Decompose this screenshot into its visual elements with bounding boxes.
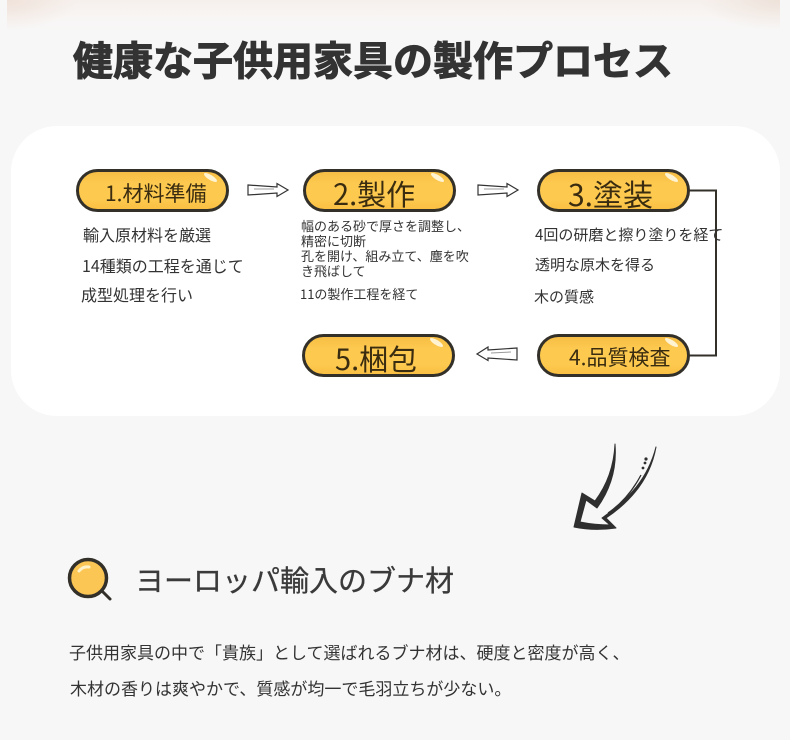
step 2 pill	[303, 169, 456, 212]
step 2 text: 精密に切断	[301, 231, 366, 250]
step 3 text: 透明な原木を得る	[535, 254, 655, 275]
step 2 text: 幅のある砂で厚さを調整し、	[301, 216, 470, 235]
body text: 子供用家具の中で「貴族」として選ばれるブナ材は、硬度と密度が高く、	[69, 639, 630, 664]
step 2 text: き飛ばして	[301, 261, 366, 280]
arrow: step 1 to 2	[247, 182, 289, 198]
step 3 pill	[537, 169, 690, 212]
step 1 text: 14種類の工程を通じて	[82, 253, 244, 277]
step 2 text: 孔を開け、組み立て、塵を吹	[301, 246, 469, 265]
connector: step 3 to 4	[690, 190, 717, 356]
step 1 text: 輸入原材料を厳選	[83, 222, 211, 246]
step 1 pill	[76, 169, 229, 212]
step 1 pill: 1.材料準備	[105, 178, 206, 208]
step 3 text	[534, 224, 723, 307]
body text	[69, 639, 630, 700]
icon: magnifying glass	[68, 558, 112, 601]
step 3 text: 木の質感	[534, 286, 594, 307]
arrow: step 2 to 3	[477, 182, 519, 198]
title: 健康な子供用家具の製作プロセス	[73, 29, 673, 87]
icon: large hand-drawn arrow	[574, 444, 656, 530]
heading: beech wood: ヨーロッパ輸入のブナ材	[135, 558, 454, 600]
step 2 text	[300, 216, 470, 303]
step 2 text: 11の製作工程を経て	[300, 284, 418, 303]
step 1 text: 成型処理を行い	[81, 282, 193, 306]
step 3 text: 4回の研磨と擦り塗りを経て	[535, 224, 723, 245]
top photo fade	[7, 0, 780, 32]
step 5 pill	[302, 334, 455, 377]
panel: process	[11, 126, 780, 416]
step 4 pill: 4.品質検査	[569, 342, 670, 372]
step 1 text	[81, 222, 244, 306]
step 4 pill	[537, 334, 690, 377]
body text: 木材の香りは爽やかで、質感が均一で毛羽立ちが少ない。	[70, 675, 511, 700]
arrow: step 4 to 5	[476, 346, 518, 362]
